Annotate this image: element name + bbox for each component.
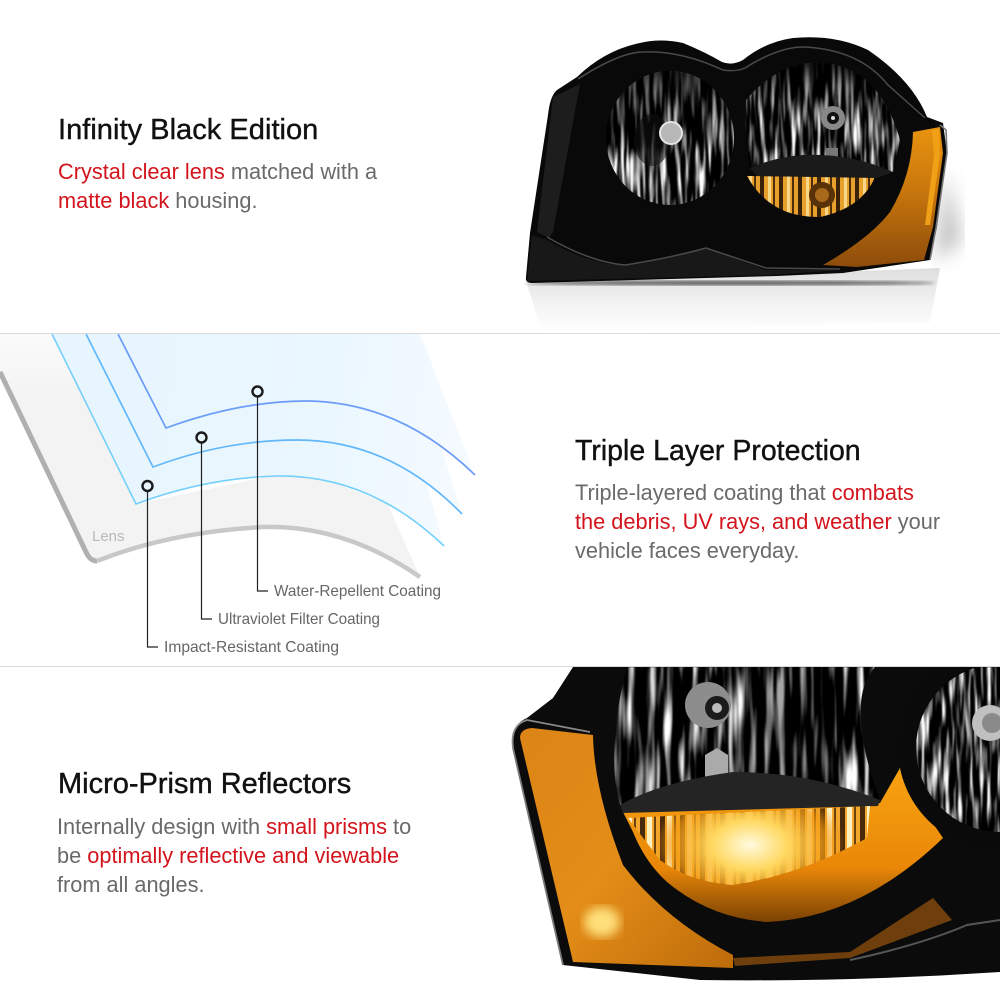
panel: Micro-Prism Reflectors	[57, 667, 1000, 980]
text block: small prisms	[57, 814, 411, 897]
text block: crystal clear lens: matte black housing.	[58, 188, 258, 213]
text block: triple-layered coating: Triple-layered coating that combats	[575, 480, 914, 505]
text block: small prisms: be optimally reflective and viewable	[57, 843, 399, 868]
housing	[513, 667, 1000, 980]
side panel	[537, 84, 580, 238]
layer 1	[52, 334, 475, 546]
text block: triple-layered coating: the debris, UV rays, and weather your	[575, 509, 940, 534]
image: lit headlight close-up	[512, 667, 1000, 980]
text block: small prisms: from all angles.	[57, 872, 204, 897]
text block: small prisms: Internally design with small prisms to	[57, 814, 411, 839]
right lens	[900, 667, 1000, 832]
callout: impact-resistant	[142, 481, 339, 656]
amber reflector	[513, 720, 733, 968]
reflection and shadow	[525, 170, 962, 332]
visor	[620, 772, 880, 813]
layer 3	[118, 334, 475, 475]
chrome reflector	[600, 667, 885, 807]
lit bulb and prisms	[628, 806, 870, 885]
callout: ultraviolet: Ultraviolet Filter Coating	[218, 611, 380, 628]
callout: water-repellent	[252, 386, 441, 600]
right lens	[740, 60, 905, 217]
callout: water-repellent: Water-Repellent Coating	[274, 583, 441, 600]
left lens	[606, 71, 734, 205]
lens label: Lens	[92, 528, 125, 545]
callout: ultraviolet	[196, 432, 380, 628]
heading: Micro-Prism Reflectors: Micro-Prism Reflectors	[58, 768, 351, 800]
text block: triple-layered coating: vehicle faces everyday.	[575, 538, 799, 563]
text block: triple-layered coating	[575, 480, 940, 563]
layer 2	[86, 334, 462, 514]
panel: Triple Layer Protection	[0, 334, 940, 656]
image: black headlight assembly	[525, 37, 965, 312]
text block: crystal clear lens: Crystal clear lens matched with a	[58, 159, 377, 184]
heading: Triple Layer Protection: Triple Layer Protection	[575, 435, 861, 467]
bottom trim	[527, 235, 840, 281]
text block: crystal clear lens	[58, 159, 378, 213]
heading: Infinity Black Edition: Infinity Black Edition	[58, 114, 318, 146]
amber corner reflector	[823, 125, 947, 267]
housing	[526, 37, 947, 283]
lens layer	[0, 334, 420, 577]
diagram: lens coating layers	[0, 334, 476, 656]
callout: impact-resistant: Impact-Resistant Coating	[164, 639, 339, 656]
panel: Infinity Black Edition	[58, 37, 965, 312]
lower black ring detail	[733, 898, 952, 966]
lower amber crescent	[623, 768, 943, 922]
visor	[750, 155, 893, 178]
